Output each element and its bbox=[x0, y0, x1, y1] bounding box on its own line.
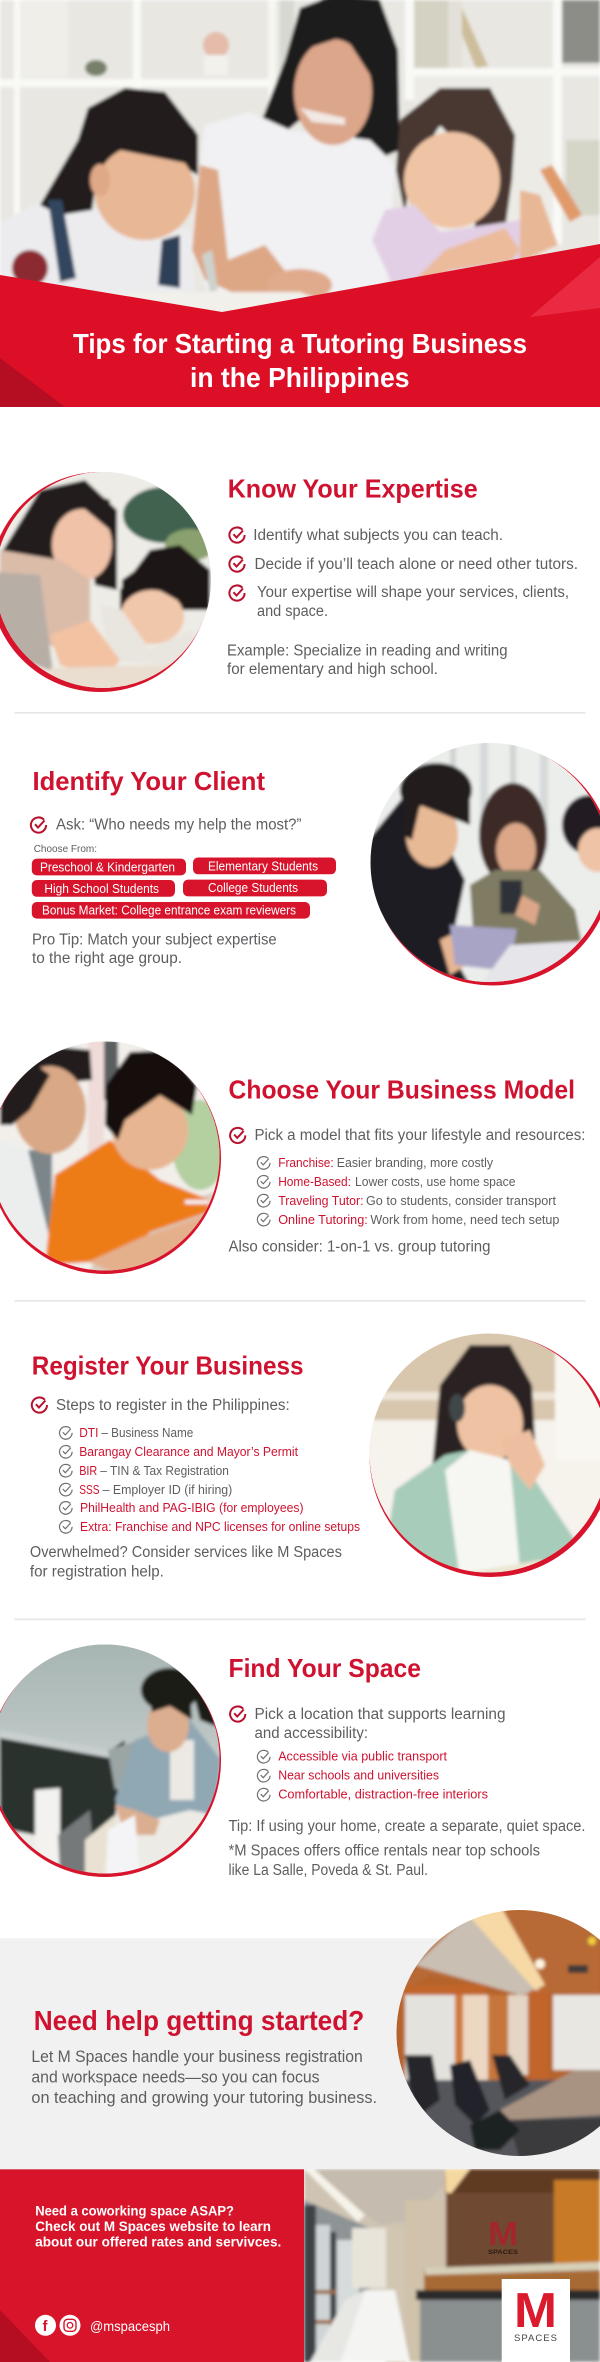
checklist item: Pick a model that fits your lifestyle and resources: bbox=[254, 1127, 586, 1144]
photo: three students with tablet bbox=[368, 740, 600, 990]
footer message bbox=[35, 2204, 281, 2250]
right girl bbox=[394, 86, 517, 229]
sub-item: comfortable interiors: Comfortable, distraction-free interiors bbox=[278, 1787, 488, 1802]
sub-item: SSS: – Employer ID (if hiring) bbox=[103, 1482, 232, 1497]
sub-item: home-based: Lower costs, use home space bbox=[355, 1174, 516, 1189]
heading: Need help getting started? bbox=[34, 2005, 364, 2036]
sub-item: BIR: – TIN & Tax Registration bbox=[100, 1463, 229, 1478]
footer message: about our offered rates and servivces. bbox=[35, 2235, 281, 2250]
sub-item: DTI: – Business Name bbox=[101, 1425, 193, 1440]
checklist item: and accessibility: bbox=[254, 1725, 368, 1742]
wall sign: M logo: M bbox=[488, 2215, 518, 2252]
pro tip bbox=[32, 931, 277, 967]
example text: for elementary and high school. bbox=[227, 661, 438, 678]
decoration: dark triangle bbox=[0, 358, 65, 407]
sub-item: franchise: Franchise: bbox=[278, 1155, 334, 1170]
note: overwhelmed: Overwhelmed? Consider services like M Spaces bbox=[30, 1544, 342, 1561]
checklist item: Steps to register in the Philippines: bbox=[56, 1397, 290, 1414]
title bbox=[73, 328, 527, 393]
photo: meeting room bbox=[390, 1905, 600, 2165]
heading: Find Your Space bbox=[228, 1653, 421, 1683]
pill: high school: High School Students bbox=[44, 882, 159, 896]
logo: M Spaces: M bbox=[514, 2284, 557, 2338]
heading: Identify Your Client bbox=[32, 766, 265, 796]
sub-item: BIR: BIR bbox=[79, 1463, 97, 1478]
photo: man at desktop bbox=[0, 1640, 225, 1880]
note: M Spaces rentals: *M Spaces offers office rentals near top schools bbox=[228, 1843, 540, 1860]
sub-item: public transport: Accessible via public transport bbox=[278, 1749, 447, 1764]
footer message: Need a coworking space ASAP? bbox=[35, 2204, 234, 2219]
panel: need help getting started bbox=[0, 1905, 600, 2169]
example text: Example: Specialize in reading and writing bbox=[227, 642, 508, 659]
photo: father and son in orange shirt bbox=[0, 1040, 228, 1285]
wall sign: M logo: SPACES bbox=[488, 2250, 518, 2256]
panel: footer call to action bbox=[0, 2169, 304, 2362]
note: M Spaces rentals bbox=[228, 1843, 540, 1879]
logo: M Spaces: SPACES bbox=[514, 2333, 557, 2344]
sub-item: barangay: Barangay Clearance and Mayor’s Permit bbox=[79, 1444, 298, 1459]
sub-item: traveling tutor bbox=[257, 1193, 556, 1208]
hero banner: red angular shape bbox=[0, 244, 600, 407]
sub-item: franchise bbox=[257, 1155, 493, 1170]
pro tip: Pro Tip: Match your subject expertise bbox=[32, 931, 277, 948]
checklist item: Ask: “Who needs my help the most?” bbox=[56, 816, 302, 833]
woman arm bbox=[190, 164, 286, 294]
pill: elementary bbox=[193, 858, 336, 874]
photo: woman with headset bbox=[369, 1330, 600, 1582]
logo: M Spaces bbox=[502, 2279, 570, 2362]
sub-item: DTI: DTI bbox=[79, 1425, 98, 1440]
heading: Register Your Business bbox=[32, 1351, 304, 1381]
decoration: light triangle bbox=[530, 257, 600, 317]
checklist item bbox=[230, 1706, 506, 1742]
left girl bbox=[1, 204, 194, 292]
pill: bonus market: Bonus Market: College entrance exam reviewers bbox=[42, 903, 296, 917]
pill: elementary: Elementary Students bbox=[208, 859, 318, 873]
sub-item: DTI bbox=[60, 1425, 193, 1440]
sub-item: near schools: Near schools and universities bbox=[278, 1768, 439, 1783]
body text: on teaching and growing your tutoring business. bbox=[31, 2088, 377, 2107]
sub-item: franchise: Easier branding, more costly bbox=[337, 1155, 493, 1170]
pro tip: to the right age group. bbox=[32, 950, 182, 967]
decoration: dark triangle bbox=[0, 2310, 50, 2362]
checklist item: Pick a location that supports learning bbox=[254, 1706, 506, 1723]
panel: choose your business model bbox=[0, 1040, 586, 1285]
body text: Let M Spaces handle your business registration bbox=[31, 2047, 363, 2066]
sub-item: traveling tutor: Traveling Tutor: bbox=[278, 1193, 364, 1208]
note: M Spaces rentals: like La Salle, Poveda & St. Paul. bbox=[228, 1862, 428, 1879]
woman bbox=[258, 0, 400, 160]
sub-item: traveling tutor: Go to students, consider transport bbox=[366, 1193, 556, 1208]
sub-item: home-based: Home-Based: bbox=[278, 1174, 351, 1189]
sub-item: online tutoring: Work from home, need tech setup bbox=[370, 1212, 559, 1227]
panel: find your space bbox=[0, 1640, 586, 1880]
note: overwhelmed bbox=[30, 1544, 342, 1580]
body text bbox=[31, 2047, 377, 2107]
note: overwhelmed: for registration help. bbox=[30, 1563, 164, 1580]
hero photo: teacher with two girls bbox=[0, 0, 600, 320]
sub-item: online tutoring bbox=[257, 1212, 559, 1227]
note: also consider: Also consider: 1-on-1 vs. group tutoring bbox=[228, 1238, 490, 1255]
panel: know your expertise bbox=[0, 470, 578, 695]
sub-item: SSS: SSS bbox=[79, 1482, 100, 1497]
sub-item: home-based bbox=[257, 1174, 516, 1189]
checklist item: Decide if you’ll teach alone or need other tutors. bbox=[254, 556, 578, 573]
checklist item: Your expertise will shape your services, clients, bbox=[257, 584, 569, 601]
sub-item: philhealth: PhilHealth and PAG-IBIG (for employees) bbox=[80, 1500, 304, 1515]
sub-item: extra: Extra: Franchise and NPC licenses for online setups bbox=[80, 1519, 360, 1534]
checklist item bbox=[229, 584, 569, 620]
example text bbox=[227, 642, 508, 678]
title: in the Philippines bbox=[190, 362, 410, 393]
checklist item: Identify what subjects you can teach. bbox=[253, 527, 503, 544]
pill: preschool: Preschool & Kindergarten bbox=[40, 860, 175, 874]
choose from label: Choose From: bbox=[34, 843, 97, 855]
heading: Know Your Expertise bbox=[228, 474, 478, 504]
sub-item: online tutoring: Online Tutoring: bbox=[278, 1212, 368, 1227]
pill: college bbox=[183, 880, 327, 896]
tip: Tip: If using your home, create a separate, quiet space. bbox=[228, 1818, 586, 1835]
footer photo: office lobby bbox=[304, 2169, 600, 2362]
pill: college: College Students bbox=[208, 881, 298, 895]
checklist item: and space. bbox=[257, 603, 328, 620]
panel: register your business bbox=[30, 1330, 600, 1582]
photo: mother and daughter at laptop bbox=[0, 470, 220, 695]
social handle: @mspacesph bbox=[90, 2318, 170, 2334]
icon: facebook bbox=[35, 2315, 56, 2336]
footer message: Check out M Spaces website to learn bbox=[35, 2219, 271, 2234]
heading: Choose Your Business Model bbox=[228, 1075, 575, 1105]
title: Tips for Starting a Tutoring Business bbox=[73, 328, 527, 359]
icon: instagram bbox=[60, 2315, 80, 2336]
body text: and workspace needs—so you can focus bbox=[31, 2068, 320, 2087]
icon: facebook: f bbox=[42, 2318, 48, 2335]
panel: identify your client bbox=[31, 740, 600, 990]
pill: high school bbox=[32, 880, 175, 897]
